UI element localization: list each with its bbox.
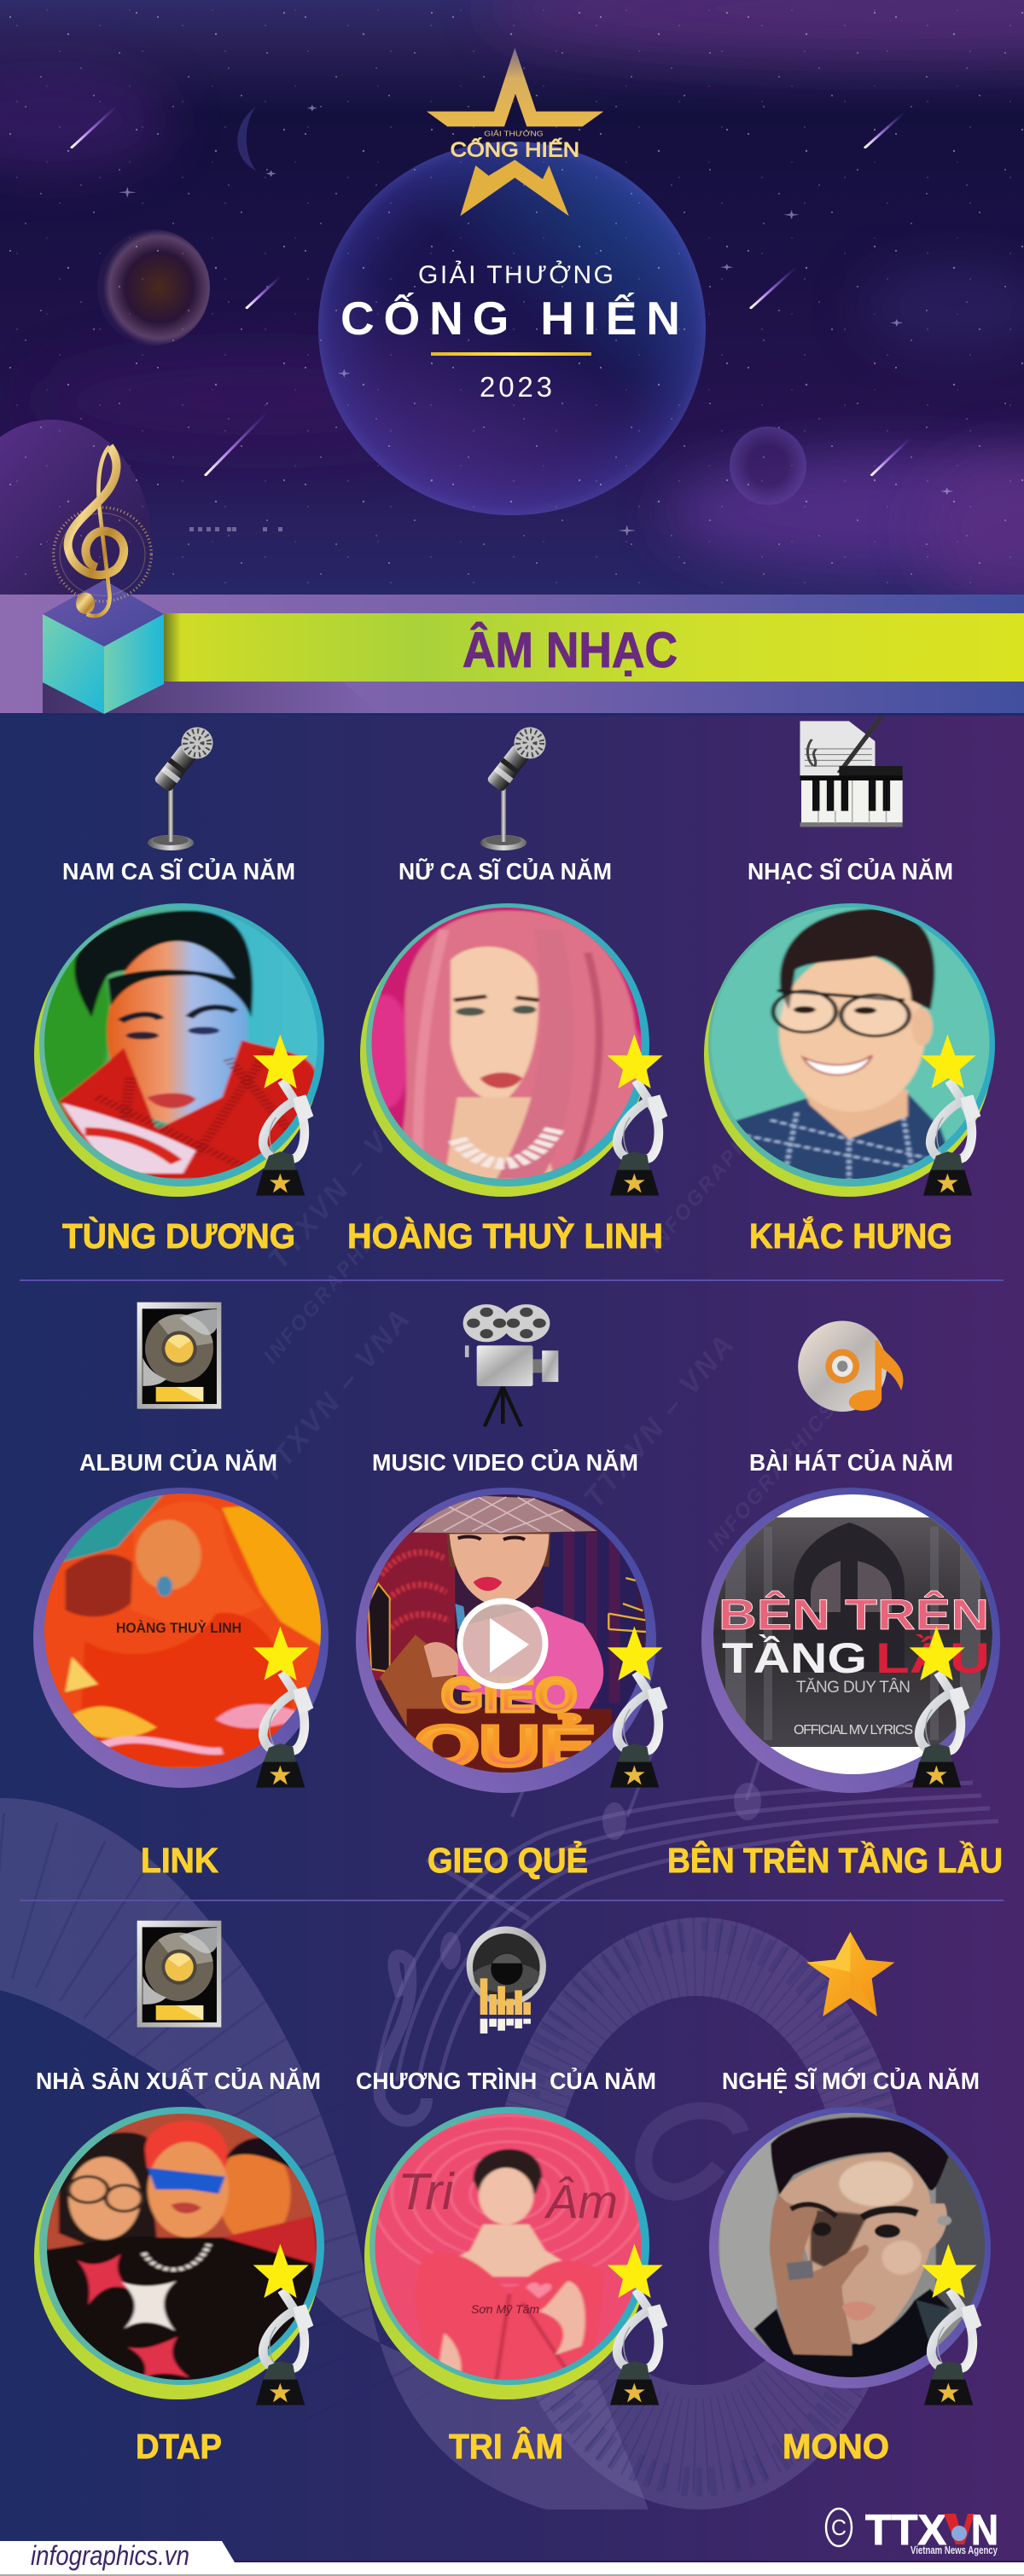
label: Music video của năm: MUSIC VIDEO CỦA NĂM	[372, 1448, 638, 1476]
watermarks: TTXVN – VNA	[262, 1088, 426, 1275]
album cover: LINK: HOÀNG THUỲ LINH	[116, 1620, 241, 1636]
song cover: Bên trên tầng lầu: TẦNG	[722, 1634, 867, 1682]
winner: Gieo Quẻ: GIEO QUẺ	[428, 1841, 588, 1880]
winner: Tri Âm: TRI ÂM	[449, 2427, 563, 2466]
music video cover: Gieo Quẻ	[356, 1484, 657, 1793]
trophy row 2 col 3	[910, 1627, 969, 1788]
icon: CD with note	[798, 1320, 903, 1412]
watermarks	[253, 1088, 841, 1556]
label: Nữ ca sĩ của năm: NỮ CA SĨ CỦA NĂM	[399, 857, 612, 885]
music video cover: Gieo Quẻ: QUẺ	[414, 1714, 596, 1778]
label: Nhà sản xuất của năm: NHÀ SẢN XUẤT CỦA NĂM	[36, 2067, 321, 2094]
section banner: Âm nhạc: ÂM NHẠC	[463, 623, 678, 678]
song cover: Bên trên tầng lầu: BÊN TRÊN	[719, 1591, 989, 1639]
logo: © TTXVN: N	[971, 2506, 998, 2554]
row 3	[32, 1921, 998, 2466]
panel: header space background	[0, 0, 1024, 672]
trophy row 3 col 3	[922, 2244, 981, 2405]
song cover: Bên trên tầng lầu: TĂNG DUY TÂN	[796, 1678, 911, 1697]
section banner: Âm nhạc	[0, 595, 1024, 716]
row 2	[32, 1303, 1003, 1880]
icon: microphone 1	[148, 727, 213, 850]
logo: Cống Hiến gold star: CỐNG HIẾN	[451, 138, 579, 162]
winner: Khắc Hưng: KHẮC HƯNG	[749, 1216, 952, 1256]
icon: producer record plaque	[137, 1921, 221, 2028]
cover: Tri Âm: Tri	[398, 2163, 455, 2220]
crescent planet	[237, 107, 256, 171]
row 1	[20, 717, 1006, 1256]
portrait: Mono	[708, 2104, 998, 2391]
trophy row 1 col 2	[608, 1035, 667, 1196]
winner: Tùng Dương: TÙNG DƯƠNG	[62, 1216, 295, 1256]
cover: Tri Âm: Âm	[544, 2174, 618, 2228]
watermarks: INFOGRAPHICS	[259, 1210, 398, 1368]
trophy row 2 col 2	[608, 1627, 667, 1788]
winner: DTAP: DTAP	[136, 2427, 222, 2466]
label: Bài hát của năm: BÀI HÁT CỦA NĂM	[749, 1448, 953, 1476]
icon: score sheet and piano	[800, 717, 903, 827]
portrait: Khắc Hưng	[699, 899, 1006, 1197]
music video cover: Gieo Quẻ: GIEO	[441, 1669, 578, 1723]
logo: © TTXVN: TTX	[865, 2506, 946, 2554]
label: Chương trình của năm: CHƯƠNG TRÌNH CỦA NĂM	[356, 2067, 656, 2094]
icon: gold star	[806, 1932, 894, 2016]
title: Giải thưởng Cống Hiến 2023: CỐNG HIẾN	[340, 292, 680, 345]
trophy row 2 col 1	[253, 1627, 313, 1788]
portrait: Tùng Dương	[34, 903, 324, 1197]
icon: gold record plaque	[137, 1303, 221, 1409]
logo: Cống Hiến gold star	[427, 48, 603, 216]
play button	[460, 1601, 545, 1686]
album cover: LINK	[32, 1484, 333, 1788]
decorative music background: piano ribbon, staff and clef	[0, 1732, 998, 2509]
planet: brown ringed	[97, 229, 210, 345]
song cover: Bên trên tầng lầu	[701, 1488, 1000, 1793]
logo: © TTXVN	[826, 2506, 998, 2556]
footer: infographics.vn strip: infographics.vn	[31, 2540, 189, 2571]
label: Album của năm: ALBUM CỦA NĂM	[79, 1448, 277, 1476]
icon: speaker with equaliser	[467, 1926, 546, 2034]
song cover: Bên trên tầng lầu: LẦU	[876, 1634, 990, 1682]
watermarks: INFOGRAPHICS	[703, 1397, 841, 1556]
watermarks: TTXVN – VNA	[253, 1302, 417, 1488]
icon: microphone 2	[480, 727, 546, 850]
trophy row 1 col 3	[921, 1035, 980, 1196]
label: Nam ca sĩ của năm: NAM CA SĨ CỦA NĂM	[62, 857, 295, 885]
footer: infographics.vn strip	[0, 2540, 1024, 2576]
planet: right small	[730, 426, 806, 505]
portrait: DTAP	[32, 2103, 333, 2399]
logo: © TTXVN: C	[831, 2515, 847, 2540]
icon: film projector	[463, 1304, 558, 1426]
label: Nhạc sĩ của năm: NHẠC SĨ CỦA NĂM	[748, 857, 953, 885]
winner: LINK: LINK	[141, 1841, 218, 1880]
logo: Cống Hiến gold star: GIẢI THƯỞNG	[484, 130, 544, 137]
icon: gold treble clef	[54, 446, 151, 616]
winner: Hoàng Thuỳ Linh: HOÀNG THUỲ LINH	[347, 1216, 663, 1256]
portrait: Hoàng Thuỳ Linh	[359, 899, 653, 1197]
trophy row 3 col 2	[608, 2244, 667, 2405]
trophy row 3 col 1	[253, 2244, 313, 2405]
cover: Tri Âm: Sơn Mỹ Tâm	[471, 2302, 539, 2316]
watermarks: INFOGRAPHICS	[643, 1099, 782, 1257]
song cover: Bên trên tầng lầu: OFFICIAL MV LYRICS	[794, 1723, 913, 1738]
winner: Mono: MONO	[783, 2427, 889, 2466]
planet: bottom-left purple	[0, 420, 152, 672]
title: Giải thưởng Cống Hiến 2023: 2023	[480, 371, 552, 403]
watermarks: TTXVN – VNA	[578, 1327, 742, 1514]
icon: cube	[43, 580, 164, 714]
title: Giải thưởng Cống Hiến 2023: GIẢI THƯỞNG	[418, 260, 614, 289]
label: Nghệ sĩ mới của năm: NGHỆ SĨ MỚI CỦA NĂM	[722, 2067, 980, 2094]
cover: Tri Âm	[364, 2103, 653, 2399]
trophy row 1 col 1	[253, 1035, 313, 1196]
planet: central bubble	[318, 142, 706, 515]
title: Giải thưởng Cống Hiến 2023	[340, 260, 680, 403]
